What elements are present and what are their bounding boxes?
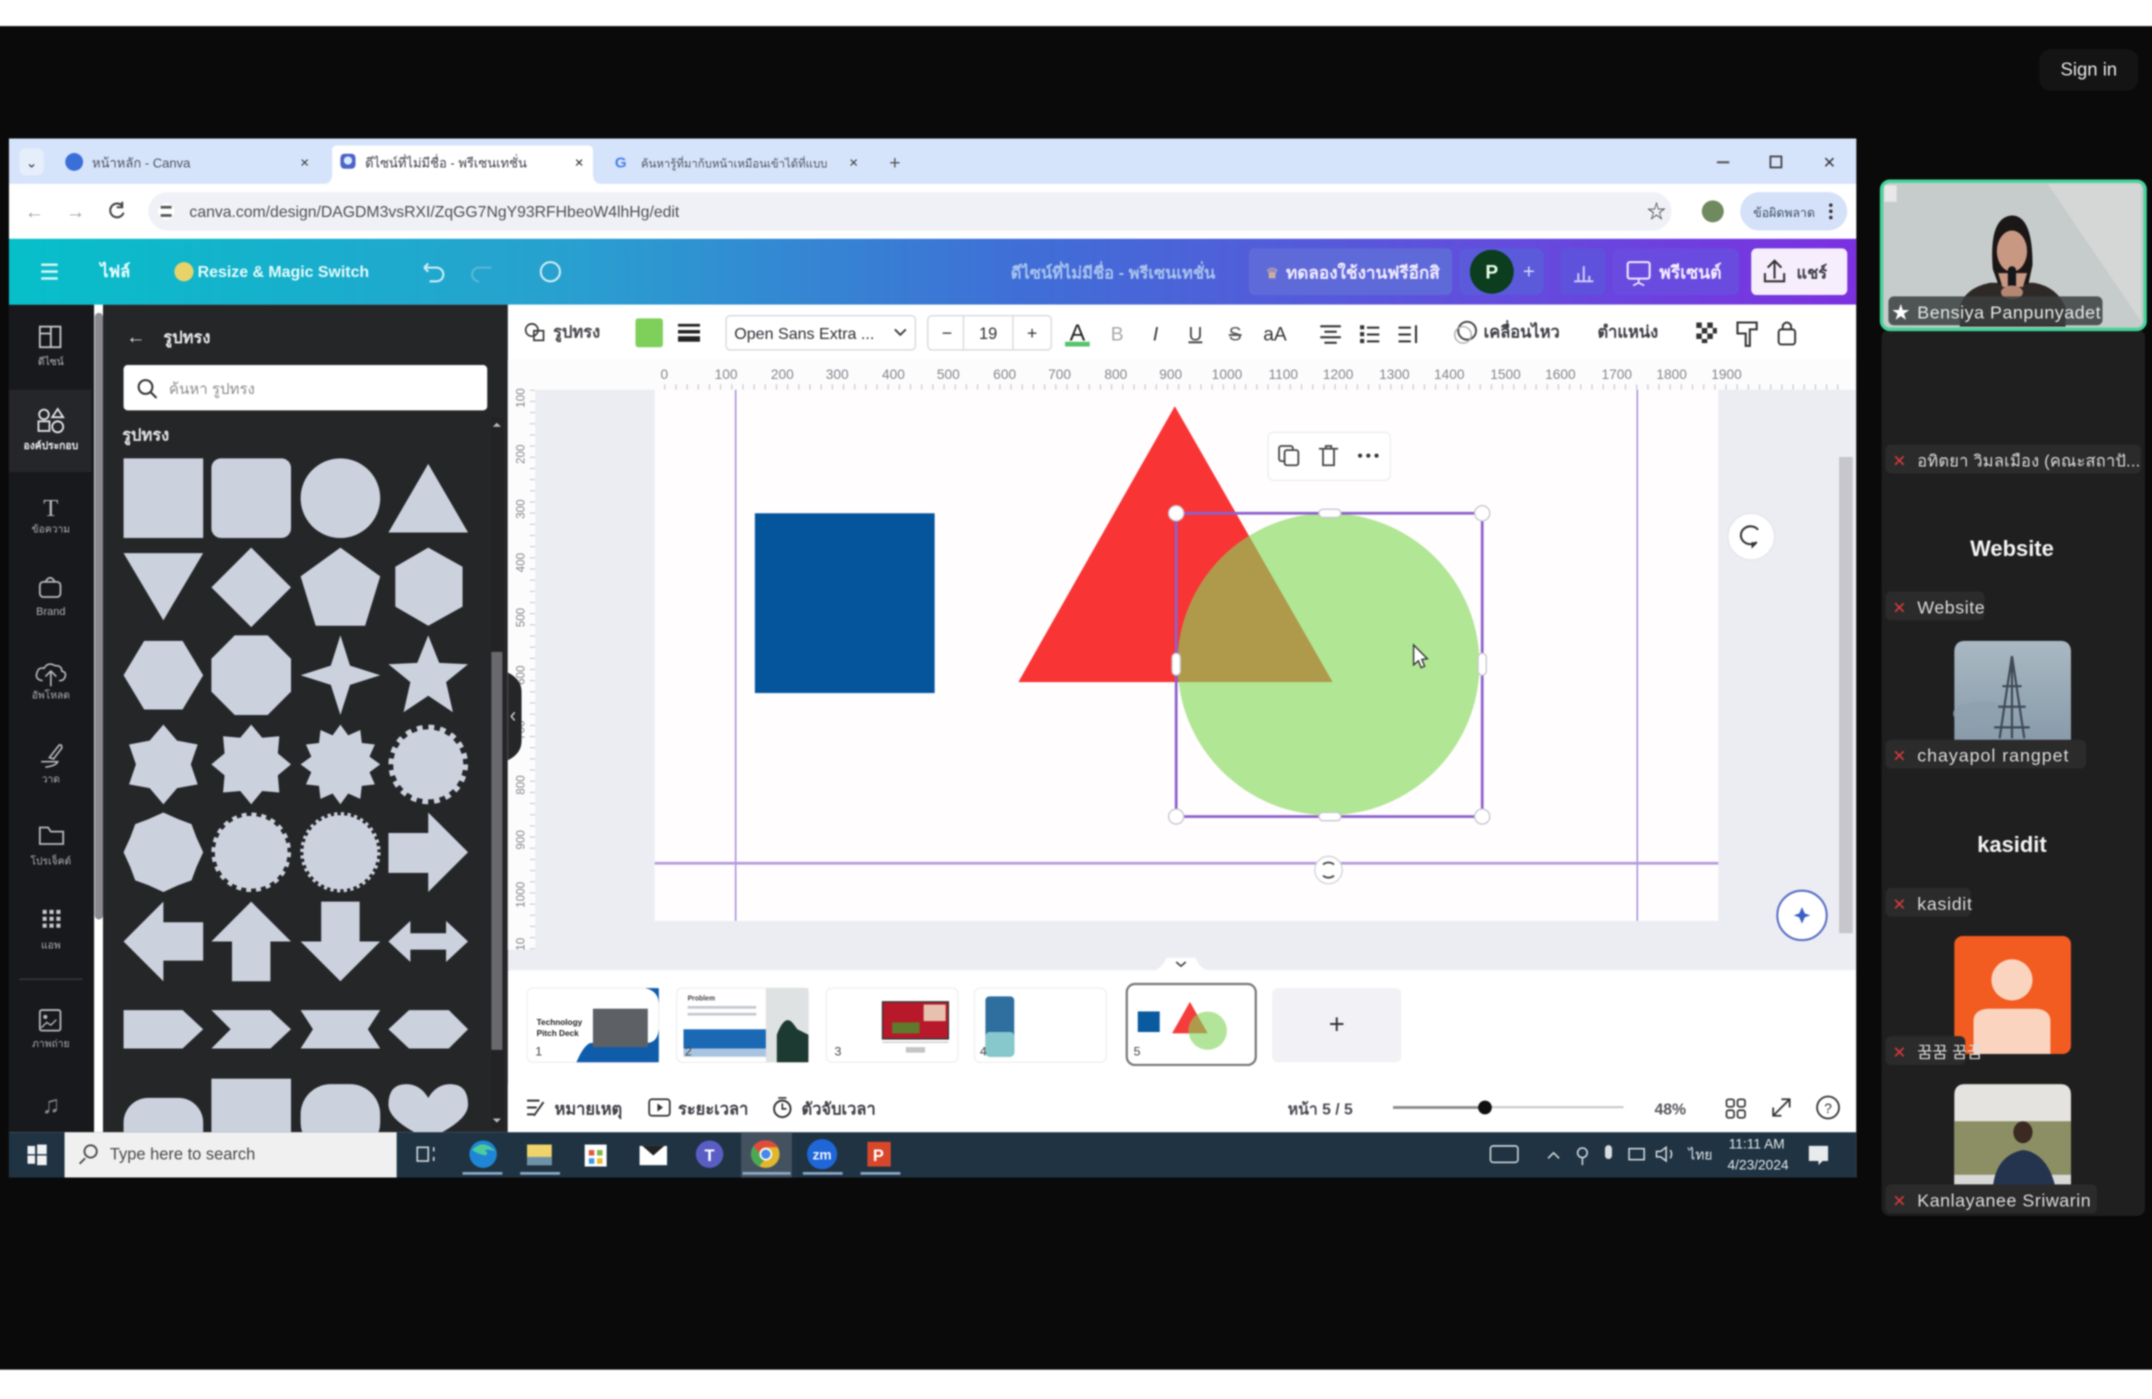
horizontal ruler: 300 — [826, 367, 849, 382]
panel collapse tab — [508, 672, 522, 760]
red triangle — [1018, 406, 1333, 682]
browser address bar: canva.com/design/DAGDM3vsRXI/ZqGG7NgY93RFHbeoW4lhHg/edit — [189, 204, 680, 221]
zoom icon — [807, 1139, 837, 1169]
rail item: photos — [32, 1010, 70, 1050]
browser address bar: → — [66, 202, 85, 223]
mouse cursor — [1414, 645, 1427, 668]
chrome icon — [751, 1140, 780, 1168]
editor top toolbar: 19 — [979, 325, 997, 343]
powerpoint icon: P — [873, 1147, 884, 1165]
taskbar running indicators — [463, 1172, 900, 1175]
clock: 4/23/2024 — [1728, 1157, 1789, 1172]
magic assistant button — [1777, 891, 1827, 940]
rail item: text: T — [43, 495, 58, 522]
canva header bar: Resize & Magic Switch — [198, 264, 369, 281]
horizontal ruler: 1600 — [1545, 367, 1576, 382]
canvas scrollbar — [1839, 457, 1853, 933]
horizontal ruler: 600 — [993, 367, 1016, 382]
participant label 2: Website — [1917, 597, 1985, 617]
rail item: design — [38, 327, 64, 368]
shape library grid — [124, 458, 468, 1167]
rail item: elements — [24, 409, 78, 452]
participant label 1: ✕ — [1893, 453, 1906, 471]
horizontal ruler — [508, 360, 1856, 390]
editor top toolbar: รูปทรง — [553, 324, 600, 344]
clock: 11:11 AM — [1729, 1137, 1785, 1152]
horizontal ruler: 700 — [1048, 367, 1071, 382]
editor top toolbar: B — [1111, 324, 1124, 345]
horizontal ruler: 400 — [882, 367, 905, 382]
thumbnail 3: 3 — [834, 1044, 841, 1058]
participant label 3: chayapol rangpet — [1917, 746, 2069, 766]
comment button — [1728, 513, 1775, 560]
vertical ruler: 200 — [514, 444, 527, 464]
editor top toolbar: S — [1229, 324, 1242, 345]
powerpoint icon — [867, 1142, 891, 1167]
vertical ruler: 600 — [514, 665, 527, 685]
blue square — [755, 513, 935, 693]
horizontal ruler: 1800 — [1656, 367, 1687, 382]
rail item: brand: Brand — [36, 606, 65, 618]
taskbar search box: Type here to search — [110, 1146, 255, 1164]
thumbnail 2: Problem — [688, 995, 715, 1002]
browser tab strip: ⌄ — [26, 155, 37, 170]
horizontal ruler: 1400 — [1434, 367, 1465, 382]
panel heading — [126, 327, 210, 349]
windows taskbar — [9, 1132, 1856, 1177]
thumbnail 2 — [677, 988, 808, 1062]
browser address bar: ข้อผิดพลาด — [1753, 206, 1815, 220]
browser tab strip: × — [300, 154, 309, 171]
browser address bar: ← — [25, 202, 44, 223]
thumbnail 1 — [527, 988, 659, 1062]
editor bottom status bar: 48% — [1654, 1101, 1686, 1118]
editor top toolbar: I — [1153, 324, 1159, 345]
editor top toolbar: aA — [1263, 324, 1287, 345]
speaker name: Bensiya Panpunyadet — [1917, 302, 2101, 322]
speaker name — [1888, 296, 2103, 325]
thumbnail 5 selected: 5 — [1134, 1044, 1141, 1058]
editor top toolbar: A — [1070, 319, 1086, 345]
editor bottom status bar — [508, 1084, 1856, 1132]
horizontal ruler: 1100 — [1268, 367, 1298, 382]
presenter photo — [1960, 215, 2065, 327]
rail item: draw: วาด — [42, 774, 60, 785]
participant label 4: ✕ — [1893, 896, 1906, 914]
participant label 2: ✕ — [1893, 599, 1906, 617]
editor bottom status bar: ตัวจับเวลา — [802, 1100, 876, 1118]
browser tab strip: ค้นหารู้ที่มาก้บหน้าเหมือนเข้าได้ที่แบบ — [641, 155, 827, 170]
thumbnail 1: Technology — [537, 1018, 583, 1027]
section label: รูปทรง — [122, 427, 169, 447]
editor top toolbar: ตำแหน่ง — [1598, 324, 1658, 342]
canvas workspace — [508, 360, 1856, 970]
taskbar search box — [65, 1132, 397, 1177]
vertical ruler — [508, 388, 535, 951]
editor top toolbar — [508, 305, 1856, 360]
search box: ค้นหา รูปทรง — [169, 381, 255, 398]
browser address bar: ☆ — [1647, 201, 1666, 223]
participant label 4 — [1886, 888, 1973, 917]
canva header bar — [9, 239, 1856, 305]
add page button — [1272, 988, 1401, 1062]
horizontal ruler: 800 — [1104, 367, 1128, 382]
vertical ruler: 1000 — [514, 881, 527, 908]
panel heading: รูปทรง — [163, 329, 210, 349]
page thumbnails strip — [506, 969, 1401, 1132]
active speaker tile — [1882, 181, 2145, 329]
editor bottom status bar: ระยะเวลา — [678, 1100, 748, 1118]
selection box — [1169, 506, 1490, 824]
participant label 5 — [1886, 1036, 1982, 1065]
editor top toolbar: + — [1027, 323, 1037, 343]
rail item: elements: องค์ประกอบ — [24, 440, 78, 452]
overlap region — [1178, 536, 1333, 683]
zoom participants panel — [1882, 181, 2145, 1216]
browser tab strip: + — [889, 153, 900, 174]
thumbnail 1: 1 — [535, 1044, 542, 1058]
rail item: design: ดีไซน์ — [38, 356, 64, 368]
orange avatar tile — [1954, 936, 2071, 1054]
browser tab strip: G — [615, 154, 627, 171]
participant label 6: Kanlayanee Sriwarin — [1917, 1190, 2091, 1210]
rotate handle — [1315, 856, 1342, 884]
mail icon — [640, 1146, 667, 1165]
rail item: brand — [36, 578, 65, 618]
editor top toolbar: − — [942, 323, 952, 343]
rail item: projects: โปรเจ็คต์ — [30, 854, 71, 868]
vertical ruler: 400 — [514, 552, 527, 572]
participant label 3 — [1886, 740, 2086, 769]
browser window — [9, 139, 1856, 1177]
vertical ruler: 500 — [514, 607, 527, 627]
vertical ruler: 800 — [514, 775, 527, 795]
rail item: uploads: อัพโหลด — [32, 689, 70, 702]
participant label 3: ✕ — [1893, 748, 1906, 766]
system tray — [1490, 1146, 1672, 1165]
canva header bar: ♛ — [1265, 266, 1279, 283]
tile name: kasidit: kasidit — [1977, 832, 2047, 857]
rail item: photos: ภาพถ่าย — [32, 1039, 70, 1050]
rail item: uploads — [32, 664, 70, 702]
horizontal ruler: 0 — [660, 367, 668, 382]
browser address bar — [9, 184, 1856, 239]
vertical ruler: 700 — [514, 720, 527, 740]
zoom icon: zm — [813, 1148, 832, 1163]
edge icon — [469, 1140, 497, 1168]
horizontal ruler: 1200 — [1323, 367, 1354, 382]
panel heading: ← — [126, 327, 146, 348]
store icon — [585, 1145, 607, 1167]
thumbnail 4 — [974, 988, 1106, 1062]
teams icon — [696, 1140, 723, 1168]
browser tab strip: × — [1823, 151, 1835, 174]
horizontal ruler: 1300 — [1379, 367, 1410, 382]
sign in button: Sign in — [2061, 58, 2117, 79]
horizontal ruler: 500 — [937, 367, 960, 382]
editor top toolbar: U — [1188, 324, 1202, 345]
editor top toolbar: เคลื่อนไหว — [1484, 320, 1560, 342]
canva header bar: ไฟล์ — [98, 261, 130, 281]
rail item: apps: แอพ — [41, 940, 61, 951]
speaker name: ★ — [1892, 302, 1910, 322]
input language: ไทย — [1687, 1148, 1712, 1163]
participant label 6 — [1886, 1184, 2097, 1213]
browser tab strip: × — [849, 154, 858, 171]
task view icon — [417, 1147, 434, 1161]
add page button: + — [1329, 1008, 1345, 1039]
panel scrollbar — [491, 417, 504, 1128]
slide page — [655, 390, 1718, 921]
editor bottom status bar: ? — [1824, 1101, 1832, 1116]
horizontal ruler: 1700 — [1601, 367, 1632, 382]
vertical ruler: 900 — [514, 830, 527, 850]
thumbnail 1: Pitch Deck — [537, 1029, 579, 1038]
rail item: audio: ♫ — [42, 1092, 60, 1119]
browser tab strip: ดีไซน์ที่ไม่มีชื่อ - พรีเซนเทชั่น — [365, 153, 527, 170]
vertical ruler: 10 — [514, 937, 527, 951]
vertical ruler: 300 — [514, 499, 527, 519]
pages collapse tab — [1153, 958, 1209, 970]
shapes side panel — [103, 305, 509, 1167]
editor top toolbar: Open Sans Extra ... — [734, 325, 874, 343]
participant label 1: อทิตยา วิมลเมือง (คณะสถาปั... — [1917, 453, 2140, 471]
thumbnail 4: 4 — [980, 1044, 987, 1058]
start button — [28, 1145, 47, 1165]
tower avatar tile — [1953, 641, 2071, 769]
participant label 5: ✕ — [1893, 1044, 1906, 1062]
notification icon — [1809, 1146, 1828, 1165]
file explorer icon — [527, 1145, 552, 1165]
canva header bar: แชร์ — [1796, 264, 1827, 283]
rail item: draw — [41, 745, 62, 785]
horizontal ruler: 200 — [771, 367, 794, 382]
browser tab strip: หน้าหลัก - Canva — [92, 155, 191, 170]
browser tab strip: × — [575, 154, 584, 171]
left icon rail — [9, 305, 103, 1132]
participant label 5: 꿈꿈 꿈꿈 — [1917, 1044, 1982, 1062]
thumbnail 2: 2 — [685, 1044, 692, 1058]
participant label 6: ✕ — [1893, 1192, 1906, 1210]
browser tab strip — [9, 139, 1856, 184]
thumbnail 3 — [826, 988, 958, 1062]
editor bottom status bar: หน้า 5 / 5 — [1288, 1100, 1353, 1118]
green circle — [1178, 513, 1479, 815]
rail item: projects — [30, 828, 71, 868]
clock — [1728, 1137, 1789, 1172]
horizontal ruler: 1000 — [1212, 367, 1243, 382]
thumbnail 5 selected — [1127, 984, 1256, 1065]
rail item: text: ข้อความ — [32, 523, 70, 535]
kanlayanee photo tile — [1954, 1084, 2071, 1188]
canva header bar: ดีไซน์ที่ไม่มีชื่อ - พรีเซนเทชั่น — [1011, 261, 1216, 283]
active window highlight — [741, 1132, 792, 1177]
canva header bar: P — [1485, 263, 1498, 284]
horizontal ruler: 1500 — [1490, 367, 1521, 382]
horizontal ruler: 900 — [1159, 367, 1183, 382]
floating context toolbar — [1268, 432, 1390, 480]
teams icon: T — [705, 1147, 715, 1165]
vertical ruler: 100 — [514, 388, 527, 408]
guide lines — [655, 390, 1718, 921]
canva header bar: พรีเซนต์ — [1659, 262, 1722, 283]
rail item: apps — [41, 910, 61, 951]
search box — [124, 365, 487, 410]
horizontal ruler: 100 — [715, 367, 738, 382]
participant label 4: kasidit — [1917, 894, 1973, 914]
rail item: text — [32, 495, 70, 535]
canva header bar: + — [1523, 261, 1535, 284]
editor bottom status bar: หมายเหตุ — [554, 1100, 622, 1119]
sign in button — [2039, 49, 2138, 91]
canva header bar: ทดลองใช้งานฟรีอีกสิ — [1286, 263, 1440, 283]
participant label 1 — [1886, 445, 2141, 473]
tile name: website: Website — [1970, 536, 2054, 561]
participant label 2 — [1886, 591, 1985, 620]
horizontal ruler: 1900 — [1711, 367, 1742, 382]
